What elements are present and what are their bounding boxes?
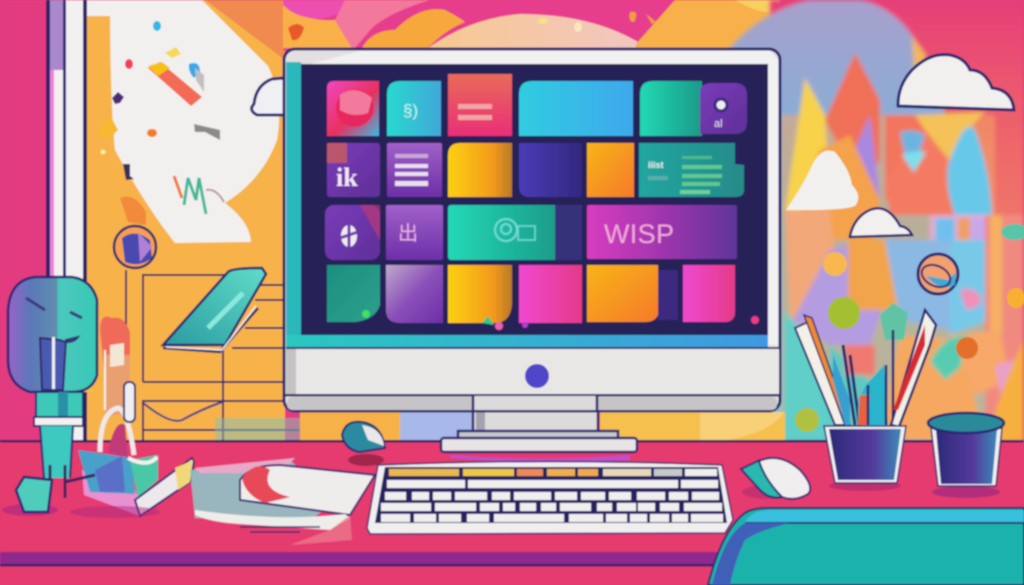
right clouds — [786, 55, 1014, 294]
keys row 3 — [385, 492, 719, 500]
power button — [525, 364, 549, 388]
pencils — [795, 310, 936, 430]
wall background — [0, 0, 1024, 442]
small confetti dots — [288, 12, 656, 40]
shelf lines — [126, 270, 300, 440]
cloud: small outlined — [850, 208, 912, 237]
keyboard — [367, 462, 733, 534]
desk lamp — [8, 277, 130, 478]
desk — [0, 440, 1024, 585]
right wall mural — [730, 0, 1024, 442]
small globe on desk — [342, 422, 385, 466]
lamp cord and flame — [82, 316, 130, 415]
icon: small chart sketch — [174, 176, 224, 214]
tile row 2: ik — [336, 163, 358, 192]
keys row 2 — [387, 480, 718, 488]
window frame — [46, 0, 87, 442]
shadow under items — [70, 506, 160, 518]
monitor body — [284, 49, 780, 411]
keys row 4 — [381, 503, 722, 511]
small teal cup — [2, 465, 95, 516]
tile row 1 — [327, 74, 747, 136]
keys row 5 — [381, 514, 723, 522]
monitor stand — [441, 396, 637, 463]
tile row 4 — [327, 265, 759, 330]
tile row 3: WISP — [604, 219, 674, 249]
mural dots — [795, 224, 1024, 432]
open notebook / papers — [190, 458, 375, 545]
big white wall circle with small shapes — [87, 0, 279, 243]
icon: floating orange bar — [148, 47, 204, 106]
pencil cup — [795, 310, 936, 491]
cloud: large outlined — [898, 55, 1014, 110]
cloud: white no outline — [786, 150, 858, 210]
tile row 1: al — [714, 118, 723, 130]
tile row 2: iiist — [648, 160, 664, 170]
tile row 2 — [327, 143, 744, 197]
tile row 3 — [325, 205, 737, 260]
monitor — [284, 49, 780, 463]
left cloud behind monitor — [252, 78, 284, 115]
icon: ring — [918, 254, 958, 294]
tile row 1: §) — [403, 101, 418, 120]
app tile grid — [325, 74, 759, 330]
teal chair back — [708, 508, 1024, 585]
padlock box on desk — [78, 382, 194, 516]
tile row 3: 出 — [398, 222, 418, 245]
icon: wall clock ring — [114, 226, 156, 268]
plain cup — [928, 413, 1004, 498]
computer mouse — [741, 458, 810, 499]
keys row 1 — [389, 469, 717, 476]
icon: tablet on stand — [163, 268, 266, 352]
